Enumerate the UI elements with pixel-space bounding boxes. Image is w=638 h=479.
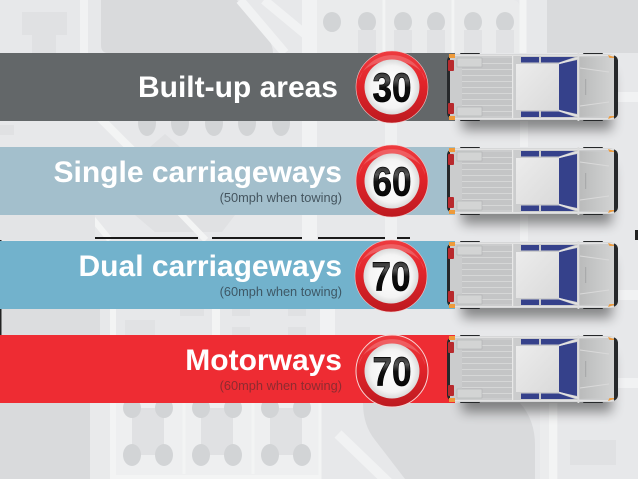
panel: single carriageways	[0, 145, 618, 217]
note: (60mph when towing)	[220, 378, 342, 393]
heading: Motorways	[185, 344, 342, 377]
speed sign 60	[356, 145, 428, 217]
speed sign 30: 30	[372, 64, 412, 110]
heading: Built-up areas	[138, 71, 338, 104]
truck	[447, 53, 618, 121]
note: (60mph when towing)	[220, 284, 342, 299]
speed sign 70: 70	[372, 348, 412, 394]
panel: dual carriageways	[0, 240, 618, 312]
panel: motorways	[0, 335, 618, 407]
bar	[0, 53, 455, 121]
truck	[447, 147, 618, 215]
heading: Dual carriageways	[79, 250, 342, 283]
note: (50mph when towing)	[220, 190, 342, 205]
speed sign 30	[356, 51, 428, 123]
speed sign 70	[355, 240, 427, 312]
panel: built-up areas	[0, 51, 618, 123]
bar	[0, 241, 455, 309]
truck	[447, 241, 618, 309]
speed sign 70: 70	[372, 254, 410, 300]
speed sign 60: 60	[372, 158, 412, 204]
heading: Single carriageways	[54, 156, 342, 189]
speed sign 70	[356, 335, 428, 407]
bar	[0, 335, 455, 403]
bar	[0, 147, 455, 215]
truck	[447, 335, 618, 403]
